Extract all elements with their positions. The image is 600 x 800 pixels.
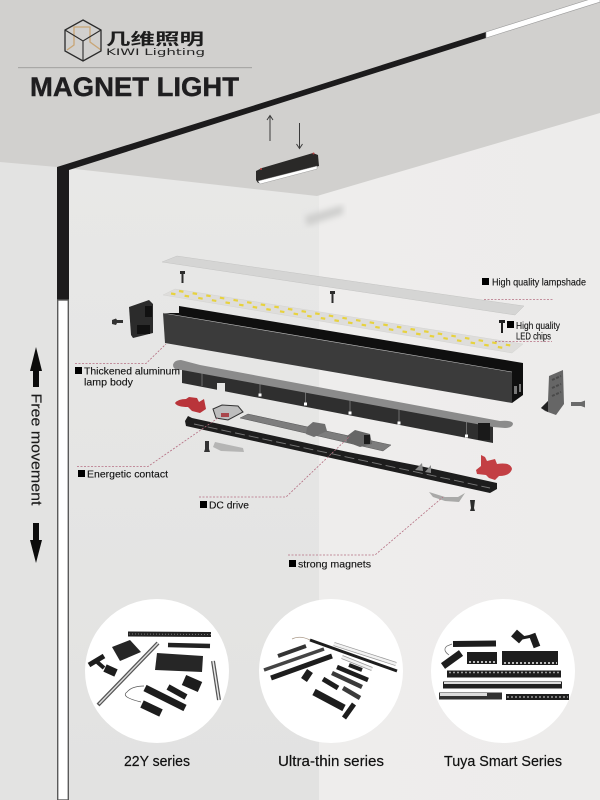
leader lines: [75, 300, 553, 555]
aluminum lamp body: [163, 306, 523, 403]
label: DC drive: DC drive: [209, 500, 249, 512]
lower rail: [185, 416, 497, 493]
exploded view of magnet light: [112, 256, 585, 511]
DC drive board: [240, 414, 391, 451]
wall magnetic track: [57, 167, 69, 800]
top screw right: [499, 320, 505, 333]
wall shadow: [305, 205, 343, 226]
free movement down arrow: [30, 523, 42, 563]
ceiling: [0, 0, 600, 196]
red clip right: [476, 455, 512, 480]
series name: 22Y series: 22Y series: [124, 753, 190, 770]
driver housing: [173, 360, 513, 443]
free movement up arrow: [30, 347, 42, 387]
label: energetic contact: Energetic contact: [87, 468, 168, 480]
magnet right: [429, 492, 465, 502]
products: 22Y series: [89, 634, 219, 713]
series name: Tuya Smart Series: Tuya Smart Series: [444, 753, 562, 770]
lower screw left: [204, 441, 210, 452]
header divider: [18, 67, 252, 68]
label: high quality LED chips: High quality: [516, 320, 561, 332]
label: thickened aluminum lamp body: Thickened aluminum: [84, 366, 180, 378]
lampshade: [162, 256, 524, 315]
logo: [65, 20, 205, 61]
ceiling light fixture: [256, 152, 319, 184]
products: Ultra-thin series: [264, 637, 397, 718]
product circle: 22Y series: [85, 599, 229, 770]
logo Chinese name: 几维照明: [106, 26, 204, 49]
ceiling magnetic track: [57, 0, 600, 170]
magnet left: [213, 442, 244, 452]
title: MAGNET LIGHT: [30, 72, 239, 102]
product circle: Tuya Smart Series: [431, 599, 575, 770]
label: strong magnets: strong magnets: [298, 558, 371, 570]
product circle: Ultra-thin series: [259, 599, 403, 770]
label: high quality LED chips: [507, 320, 561, 342]
arrow up: mounting: [267, 116, 273, 141]
logo mark: hexagon cube: [65, 20, 101, 61]
right end cap: [541, 370, 564, 415]
label: high quality lampshade: High quality lampshade: [492, 276, 586, 288]
left end cap: [129, 300, 153, 338]
right end cap screw: [571, 400, 585, 408]
label: thickened aluminum lamp body: [75, 366, 180, 388]
label: high quality LED chips: LED chips: [516, 330, 551, 342]
logo English name: KIWI Lighting: [106, 48, 205, 58]
products: Tuya Smart Series: [439, 633, 569, 697]
top screw middle: [330, 291, 335, 303]
free movement label: Free movement: [28, 394, 44, 506]
left end cap screw: [112, 318, 123, 325]
lower screw right: [470, 500, 475, 511]
energetic contact: [213, 405, 243, 420]
LED strip: [163, 289, 523, 353]
series name: Ultra-thin series: Ultra-thin series: [278, 753, 384, 770]
arrow down: mounting: [296, 123, 302, 148]
red clip left: [175, 397, 206, 413]
label: thickened aluminum lamp body: lamp body: [84, 376, 134, 388]
top screw left: [180, 271, 185, 283]
